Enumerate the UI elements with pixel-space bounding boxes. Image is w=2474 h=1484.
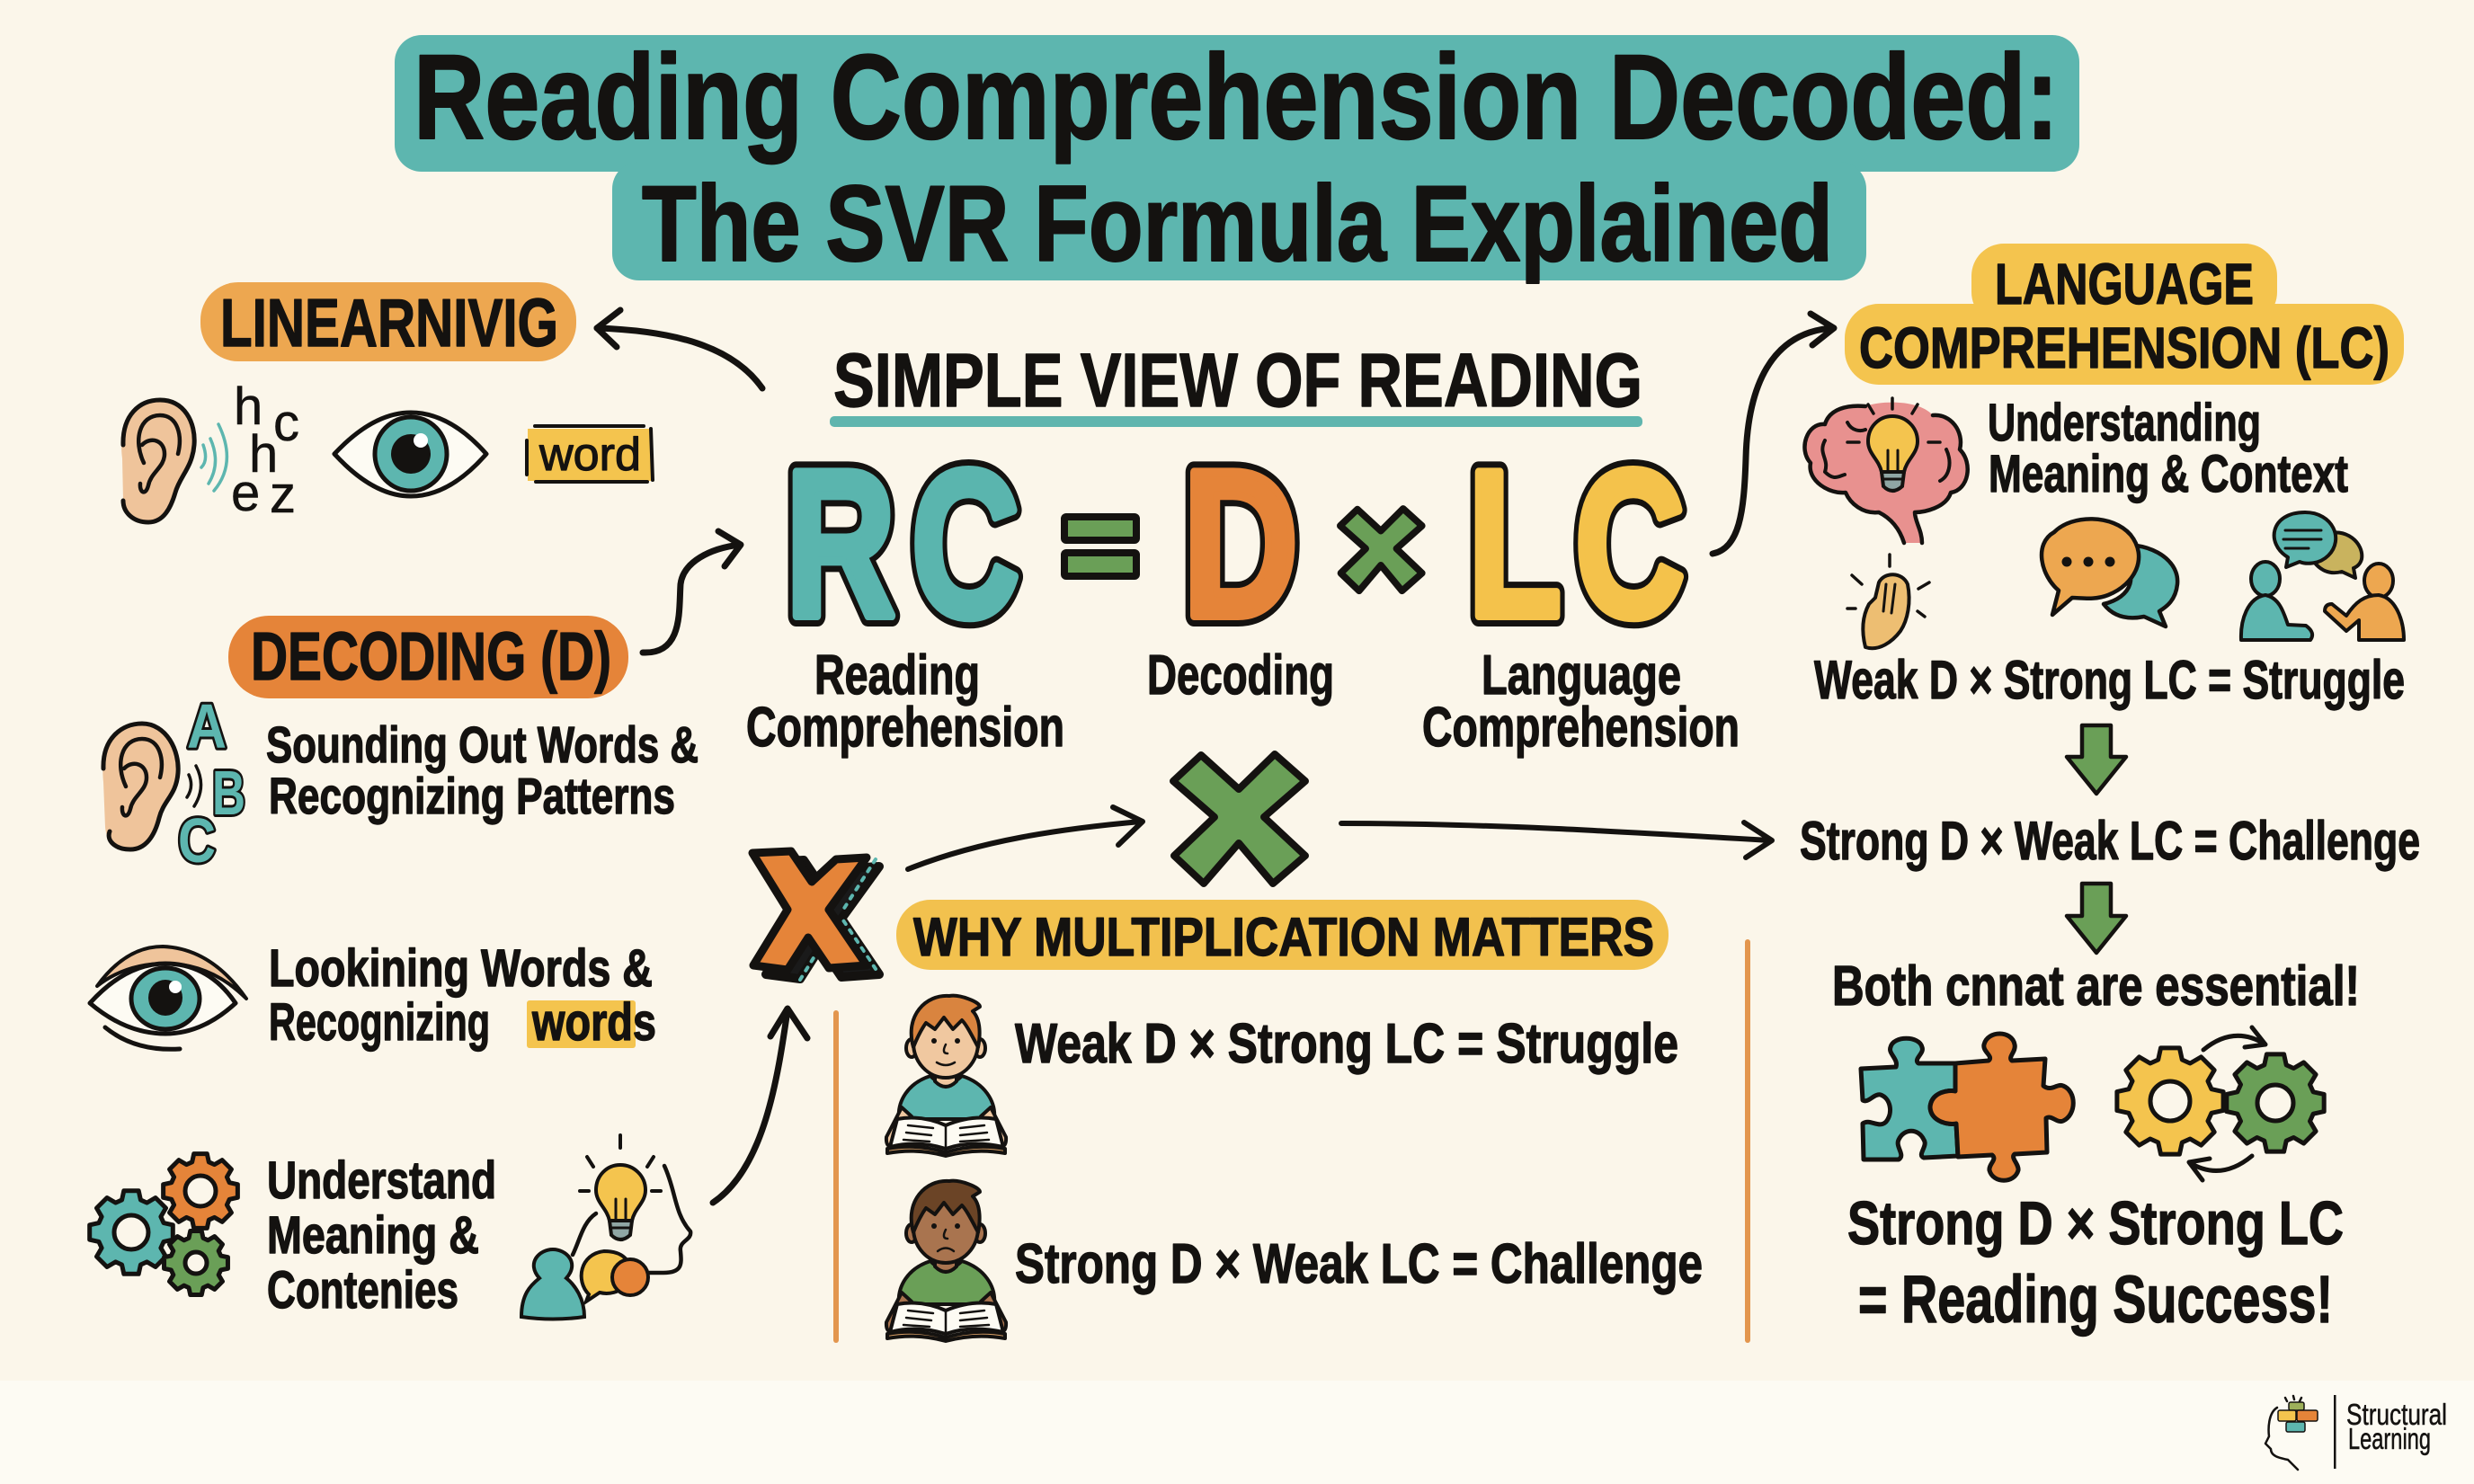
formula letters LC: [1468, 428, 1685, 661]
text: looking words: words: [531, 993, 656, 1052]
text: formula labels: Comprehension: [1422, 697, 1740, 759]
title: [395, 31, 2079, 284]
text: understand meaning: Contenies: [267, 1261, 458, 1320]
chart: formula RC = D x LC: [786, 428, 1685, 661]
heading: [896, 900, 1669, 970]
icon: eye: [334, 413, 486, 496]
text: formula labels: Reading: [814, 644, 980, 706]
logo: structural learning: Learning: [2348, 1422, 2431, 1455]
text: understanding meaning and context: Meaning & Context: [1989, 445, 2348, 503]
icon: ear with A B C: A: [187, 691, 227, 761]
text: sounding out words: Recognizing Patterns: [269, 768, 675, 825]
icon: orange multiply sign: [752, 851, 879, 980]
times sign: [1340, 509, 1422, 591]
text: understand meaning: [267, 1151, 496, 1320]
student one equation: Weak D × Strong LC = Struggle: [1015, 1013, 1678, 1075]
formula letters LC: L: [1468, 428, 1562, 661]
text: understanding meaning and context: [1988, 394, 2348, 503]
text: looking words: Lookining Words &: [269, 939, 653, 998]
icon: eye with lid: [90, 946, 246, 1049]
title: The SVR Formula Explained: [642, 164, 1833, 284]
icon: ear with A B C: C: [178, 805, 216, 875]
panel: why multiplication matters: WHY MULTIPLICATION MATTERS: [913, 907, 1654, 967]
text: reading success: Strong D × Strong LC: [1847, 1189, 2344, 1257]
title: Reading Comprehension Decoded:: [414, 31, 2059, 164]
formula letters RC: [786, 428, 1019, 661]
logo: structural learning: [2265, 1395, 2447, 1470]
icon: word highlight: word: [538, 429, 641, 481]
formula letter D: D: [1183, 428, 1298, 661]
text: sounding out words: Sounding Out Words &: [266, 716, 699, 774]
panel: language comprehension heading: LANGUAGE: [1995, 252, 2254, 316]
formula letters RC: R: [786, 428, 895, 661]
student two equation: Strong D × Weak LC = Challenge: [1015, 1233, 1703, 1295]
icon: ear with letters: h: [249, 425, 278, 484]
panel: decoding heading: DECODING (D): [251, 618, 611, 694]
arrow: green x to right column: [1341, 822, 1772, 858]
text: understand meaning: Meaning &: [267, 1206, 479, 1265]
arrow: simple view to linearnivig: [597, 310, 762, 388]
formula letters RC: C: [912, 428, 1019, 661]
formula letter D: D: [1183, 428, 1298, 661]
icon: three gears: [90, 1154, 237, 1294]
student one reading: [886, 996, 1006, 1156]
formula letters RC: R: [786, 428, 895, 661]
icon: ear with letters: z: [270, 466, 296, 524]
text: sounding out words: [266, 716, 699, 825]
icon: ear with letters: h: [234, 378, 263, 436]
text: reading success: = Reading Success!: [1858, 1262, 2333, 1337]
text: understanding meaning and context: Understanding: [1988, 394, 2261, 452]
icon: two people talking: [2241, 512, 2404, 640]
icon: brain with lightbulb: [1804, 398, 1968, 543]
right rule: [1745, 939, 1750, 1343]
text: formula labels: Comprehension: [746, 697, 1064, 759]
panel: why multiplication matters: [833, 900, 1750, 1343]
panel: linearnivig heading: LINEARNIVIG: [220, 285, 558, 360]
text: reading success: [1847, 1189, 2344, 1337]
formula letters RC: C: [912, 428, 1019, 661]
arrow: formula to language comprehension: [1713, 314, 1834, 554]
text: understand meaning: Understand: [267, 1151, 496, 1210]
arrow: decoding to formula: [643, 531, 741, 653]
text: formula labels: Decoding: [1147, 644, 1334, 706]
icon: ear with letters: e: [231, 464, 260, 522]
icon: ear with letters: c: [273, 394, 299, 452]
icon: puzzle pieces: [1861, 1034, 2073, 1180]
equals sign: [1064, 517, 1136, 576]
arrow: green down arrow one: [2067, 725, 2126, 794]
panel: simple view heading: SIMPLE VIEW OF READING: [833, 338, 1642, 422]
logo: structural learning: Structural: [2346, 1398, 2447, 1431]
text: formula labels: Language: [1482, 644, 1681, 706]
text: formula labels: [746, 644, 1740, 759]
arrow: orange x to green x: [908, 807, 1143, 869]
icon: speech bubbles: [2042, 519, 2177, 626]
icon: raised hand: [1847, 555, 1929, 648]
icon: ear with A B C: B: [212, 758, 245, 828]
text: looking words: Recognizing: [269, 993, 490, 1052]
icon: lightbulb head and person: [521, 1135, 690, 1320]
icon: green multiply sign: [1173, 754, 1305, 884]
formula letters LC: C: [1575, 428, 1685, 661]
formula letters LC: L: [1468, 428, 1562, 661]
text: looking words: [269, 939, 656, 1052]
panel: language comprehension heading: [1845, 244, 2404, 385]
formula letters LC: C: [1575, 428, 1685, 661]
arrow: green down arrow two: [2067, 884, 2126, 953]
icon: ear with A B C: [102, 691, 245, 875]
left rule: [833, 1010, 839, 1343]
icon: interlocking gears: [2117, 1027, 2324, 1180]
arrow: understanding to multiply: [713, 1009, 807, 1203]
icon: ear with letters: [121, 378, 299, 524]
student two reading: [886, 1181, 1006, 1341]
